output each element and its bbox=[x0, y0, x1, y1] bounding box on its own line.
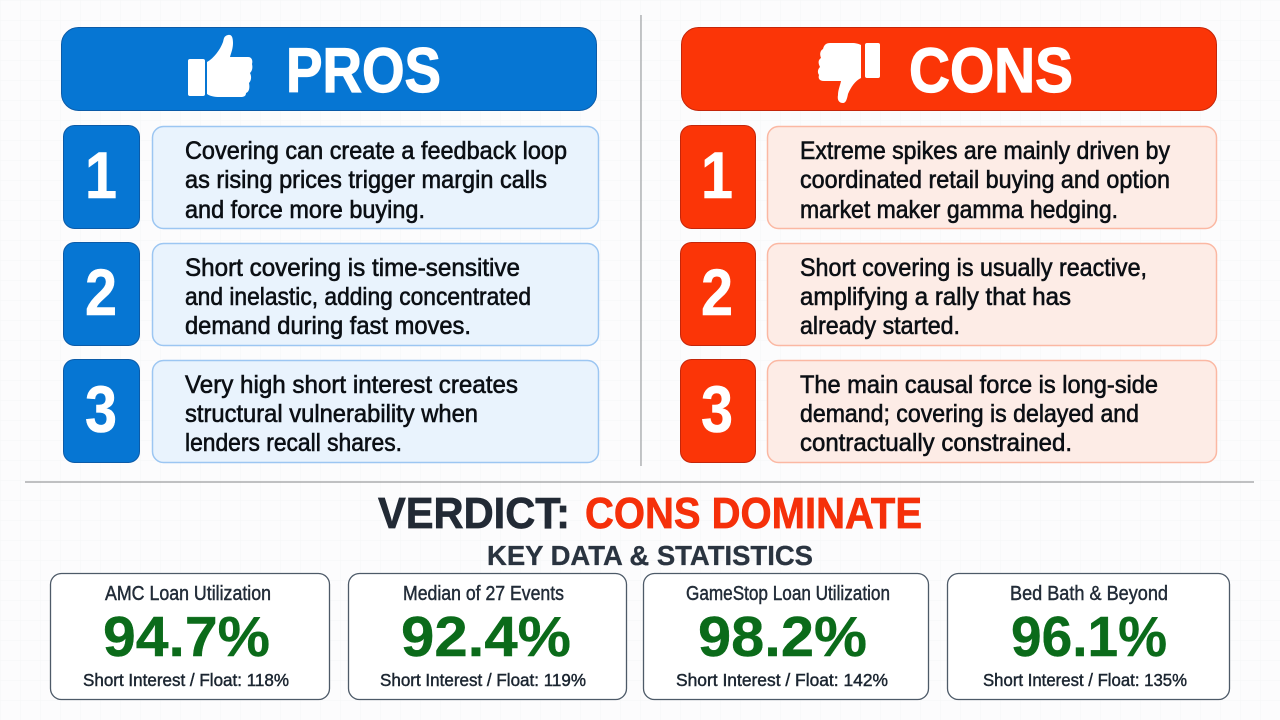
verdict heading: VERDICT: bbox=[378, 489, 570, 538]
con item 3: demand; covering is delayed and bbox=[800, 400, 1139, 428]
stat card: AMC: AMC Loan Utilization bbox=[105, 583, 271, 605]
panel: pros bbox=[62, 28, 598, 462]
icon: thumbs down bbox=[818, 43, 880, 103]
stat card: median: Short Interest / Float: 119% bbox=[380, 670, 586, 690]
pro item 2: and inelastic, adding concentrated bbox=[185, 283, 531, 311]
pro item 1: as rising prices trigger margin calls bbox=[185, 166, 547, 194]
con item 1: Extreme spikes are mainly driven by bbox=[800, 137, 1170, 165]
pro item 3 bbox=[64, 360, 598, 462]
cons header bbox=[682, 28, 1216, 110]
con item 3 bbox=[680, 360, 1216, 462]
pros header bbox=[62, 28, 596, 110]
stat card: Bed Bath & Beyond: Short Interest / Float: 135% bbox=[983, 670, 1187, 690]
verdict heading: CONS DOMINATE bbox=[585, 489, 922, 538]
stat card: GameStop bbox=[644, 574, 928, 700]
stat card: AMC: 94.7% bbox=[103, 605, 270, 669]
stat card: Bed Bath & Beyond: 96.1% bbox=[1011, 605, 1167, 669]
pro item 2: Short covering is time-sensitive bbox=[185, 254, 520, 282]
pro item 3: structural vulnerability when bbox=[185, 400, 478, 428]
pro item 2 bbox=[64, 242, 598, 346]
stat card: GameStop: Short Interest / Float: 142% bbox=[676, 670, 888, 690]
con item 1 bbox=[680, 126, 1216, 228]
key data subheading: KEY DATA & STATISTICS bbox=[487, 540, 813, 571]
con item 3: The main causal force is long-side bbox=[800, 371, 1158, 399]
con item 2: already started. bbox=[800, 312, 960, 340]
stat card: Bed Bath & Beyond bbox=[948, 574, 1230, 700]
stat card: AMC: Short Interest / Float: 118% bbox=[83, 670, 289, 690]
pro item 3: 3 bbox=[85, 372, 117, 446]
con item 2: amplifying a rally that has bbox=[800, 283, 1071, 311]
pro item 1 bbox=[64, 126, 598, 228]
stat card: AMC bbox=[50, 574, 330, 700]
pros title: PROS bbox=[286, 36, 441, 106]
pro item 3: lenders recall shares. bbox=[185, 429, 402, 457]
con item 3: 3 bbox=[701, 372, 733, 446]
icon: thumbs up bbox=[188, 35, 252, 97]
cons title: CONS bbox=[909, 36, 1073, 106]
stat card: GameStop: 98.2% bbox=[698, 605, 867, 669]
pro item 1: and force more buying. bbox=[185, 196, 425, 224]
con item 2: Short covering is usually reactive, bbox=[800, 254, 1147, 282]
stat card: median: Median of 27 Events bbox=[403, 583, 564, 605]
con item 2 bbox=[680, 242, 1216, 346]
pro item 1: 1 bbox=[85, 138, 117, 212]
con item 1: market maker gamma hedging. bbox=[800, 196, 1118, 224]
con item 2: 2 bbox=[701, 255, 733, 329]
con item 1: coordinated retail buying and option bbox=[800, 166, 1170, 194]
stat card: Bed Bath & Beyond: Bed Bath & Beyond bbox=[1010, 583, 1168, 605]
panel: cons bbox=[680, 28, 1216, 462]
stat card: median bbox=[348, 574, 626, 700]
pro item 1: Covering can create a feedback loop bbox=[185, 137, 567, 165]
con item 3: contractually constrained. bbox=[800, 429, 1072, 457]
pro item 3: Very high short interest creates bbox=[185, 371, 518, 399]
stat card: median: 92.4% bbox=[401, 605, 571, 669]
con item 1: 1 bbox=[701, 138, 733, 212]
verdict heading bbox=[378, 489, 922, 538]
stat card: GameStop: GameStop Loan Utilization bbox=[686, 583, 890, 605]
pro item 2: demand during fast moves. bbox=[185, 312, 471, 340]
pro item 2: 2 bbox=[85, 255, 117, 329]
